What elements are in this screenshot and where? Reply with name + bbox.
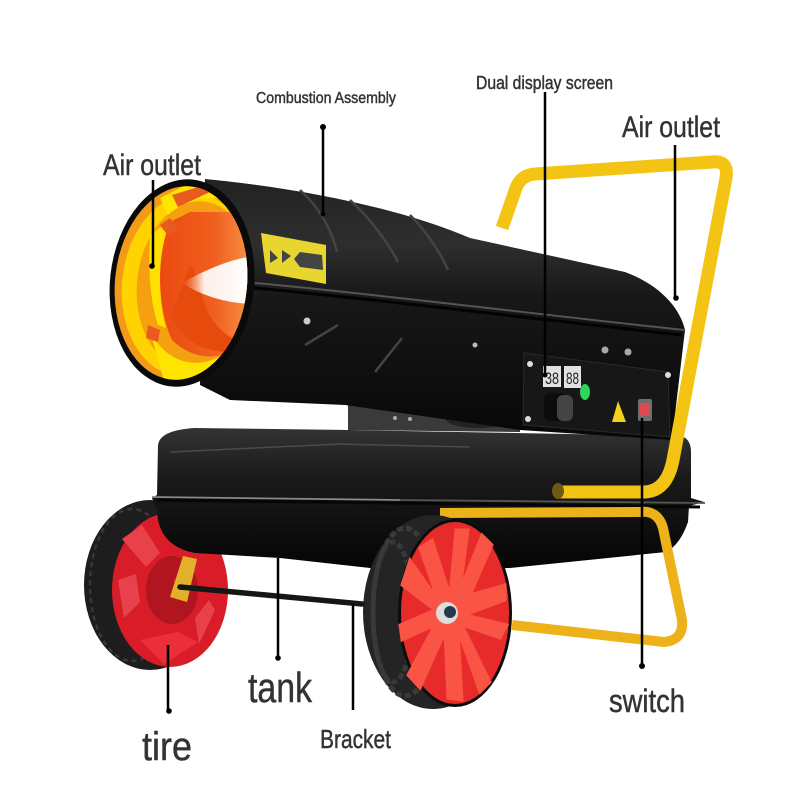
callout: switch — [609, 418, 685, 719]
callout: air outlet right: Air outlet — [622, 111, 721, 144]
callout: dual display screen — [476, 73, 613, 378]
callout: air outlet right — [622, 111, 721, 301]
flame core — [160, 212, 252, 356]
callout: air outlet left: Air outlet — [103, 149, 202, 182]
heater infographic — [84, 75, 733, 761]
callout: combustion assembly — [256, 90, 396, 216]
tank — [152, 428, 705, 568]
stand under barrel — [348, 403, 520, 432]
callout: air outlet left — [103, 149, 202, 269]
callout: bracket: Bracket — [320, 724, 392, 754]
callout: tire: tire — [142, 725, 192, 769]
callout: dual display screen: Dual display screen — [476, 73, 613, 93]
callout: tank: tank — [248, 664, 313, 711]
callout: switch: switch — [609, 683, 685, 719]
handle end — [552, 483, 564, 499]
lower yellow frame — [440, 512, 682, 642]
flame rings — [122, 198, 248, 375]
green indicator — [580, 384, 590, 400]
control panel — [523, 353, 671, 437]
warning triangle — [612, 401, 626, 422]
callout: tire — [142, 645, 192, 769]
bracket: yellow mount and rod — [170, 556, 362, 604]
dual display screen — [543, 366, 581, 388]
warning label — [261, 233, 326, 284]
barrel mouth with flame — [110, 179, 254, 387]
knob — [544, 393, 573, 421]
rear wheel / tire — [84, 500, 228, 670]
callout: combustion assembly: Combustion Assembly — [256, 90, 396, 107]
front wheel — [363, 515, 512, 709]
callout: tank — [248, 558, 313, 711]
dual display screen: 38 — [545, 369, 559, 388]
dual display screen: 88 — [566, 369, 579, 388]
upper yellow handle — [502, 162, 726, 492]
red switch — [638, 399, 652, 421]
combustion barrel — [200, 179, 685, 440]
